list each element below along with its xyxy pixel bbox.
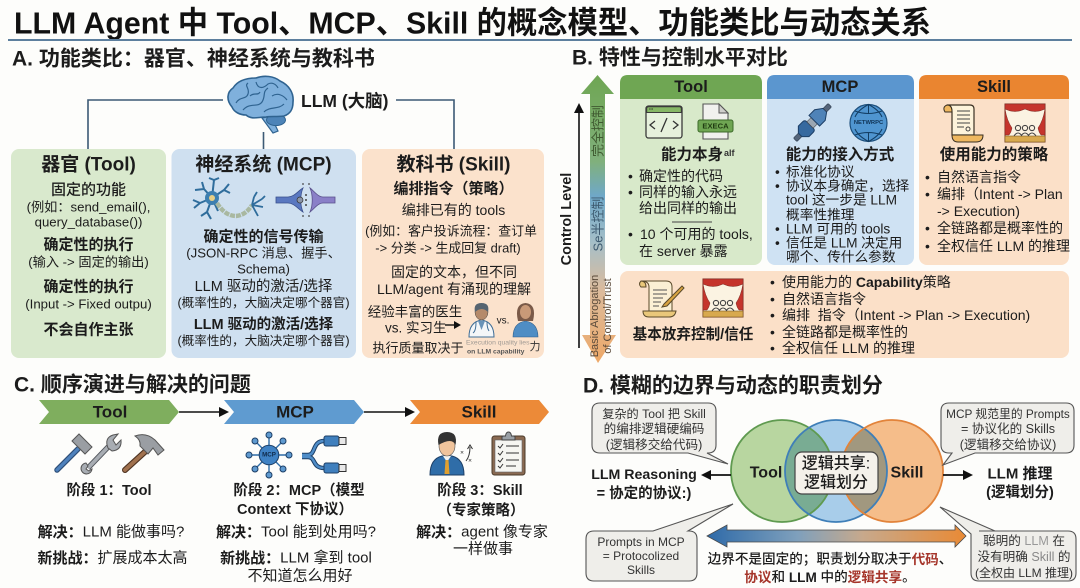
icon: theatre curtain — [703, 279, 743, 317]
stage 3 text: 一样做事 — [453, 540, 513, 558]
callout: smart LLM: 没有明确 Skill 的 — [977, 549, 1071, 564]
card: organ (Tool) — [11, 149, 166, 358]
card: organ (Tool): 确定性的执行 — [43, 278, 134, 296]
card: Tool: 在 server 暴露 — [639, 243, 728, 259]
ribbon: MCP — [224, 400, 364, 424]
card: textbook (Skill): 固定的文本，但不同 — [391, 264, 517, 280]
icon: exec file: EXECA — [702, 122, 729, 130]
card: abrogation of control — [620, 271, 1069, 358]
control level axis — [559, 103, 584, 348]
card: MCP — [767, 75, 914, 265]
panel D: blurry boundaries — [583, 374, 1076, 584]
left label: LLM reasoning — [591, 467, 697, 502]
card: Tool: • — [628, 184, 633, 200]
card: Skill — [919, 75, 1070, 265]
card: abrogation of control: 编排 指令（Intent -> Plan -> Execution) — [782, 307, 1030, 323]
icon: plug — [790, 100, 835, 145]
icon: globe: NETWRPC — [854, 120, 884, 126]
callout: prompts in MCP — [586, 504, 733, 581]
conclusion text: 协议和 LLM 中的逻辑共享。 — [744, 568, 916, 584]
callout: prompts in MCP: Prompts in MCP — [597, 535, 685, 549]
card: MCP: 信任是 LLM 决定用 — [786, 236, 902, 250]
icon: MCP hub — [246, 432, 292, 478]
conclusion text: 边界不是固定的；职责划分取决于代码、 — [708, 550, 952, 568]
card: Skill: 自然语言指令 — [937, 169, 1021, 185]
icon: scroll — [944, 105, 983, 142]
callout: smart LLM: (全权由 LLM 推理) — [975, 565, 1073, 580]
card: MCP: • — [775, 178, 780, 194]
card: textbook (Skill): 教科书 (Skill) — [396, 154, 511, 176]
stage 1 text: 解决：LLM 能做事吗? — [38, 522, 184, 540]
stage 2 text: 阶段 2：MCP（模型 — [233, 481, 365, 499]
card: Skill: 编排（Intent -> Plan — [937, 186, 1063, 202]
card: textbook (Skill): (例如：客户投诉流程：查订单 — [365, 224, 537, 238]
card: organ (Tool): (Input -> Fixed outpu) — [25, 296, 152, 312]
card: MCP: 标准化协议 — [786, 164, 855, 180]
icon: split cable — [302, 436, 346, 473]
card: Skill: • — [925, 186, 930, 202]
icon: neuron — [193, 178, 265, 219]
venn diagram: Skill — [891, 464, 923, 482]
arrow: left — [701, 470, 731, 480]
card: MCP: • — [775, 236, 780, 250]
card: textbook (Skill): vs. — [497, 316, 509, 326]
card: organ (Tool): (例如：send_email(), — [27, 200, 150, 214]
panel B: characteristics and control level — [559, 46, 1070, 363]
icon: brain — [228, 76, 293, 133]
card: Tool — [620, 75, 762, 265]
panel A: functional analogy — [11, 46, 544, 358]
faded overlapping caption — [466, 340, 530, 356]
card: organ (Tool): 固定的功能 — [51, 180, 126, 198]
icon: theatre curtain — [1005, 104, 1045, 142]
card: Tool: 10 个可用的 tools, — [640, 226, 753, 242]
icon: code window: ••• — [649, 106, 654, 111]
card: Tool: 给出同样的输出 — [639, 200, 737, 216]
card: organ (Tool): 确定性的执行 — [43, 236, 134, 254]
icon: hammer and wrench tools — [57, 434, 164, 474]
card: Skill: 使用能力的策略 — [940, 144, 1049, 164]
icon: MCP hub: MCP — [262, 452, 276, 458]
card: nervous system (MCP): 神经系统 (MCP) — [195, 152, 332, 176]
stage 2 text: Context 下协议） — [237, 501, 353, 518]
card: Tool: • — [628, 226, 633, 242]
card: MCP: • — [775, 164, 780, 180]
card: Tool: • — [628, 168, 633, 184]
card: MCP: 能力的接入方式 — [786, 144, 895, 164]
callout: MCP prompts: = 协议化的 Skills — [961, 421, 1055, 436]
card: abrogation of control: 自然语言指令 — [782, 291, 866, 307]
heading A: A. 功能类比：器官、神经系统与教科书 — [12, 46, 375, 70]
card: organ (Tool): 器官 (Tool) — [41, 152, 136, 176]
card: Tool: Tool — [674, 78, 708, 96]
ribbon: MCP: MCP — [276, 402, 314, 422]
venn diagram — [731, 420, 943, 522]
callout: smart LLM: 聪明的 LLM 在 — [983, 533, 1065, 548]
heading D: D. 模糊的边界与动态的职责划分 — [583, 374, 883, 398]
arrow: to doctor — [445, 321, 461, 329]
card: textbook (Skill): 经验丰富的医生 — [368, 304, 462, 320]
card: nervous system (MCP): LLM 驱动的激活/选择 — [194, 315, 334, 333]
title: LLM Agent 中 Tool、MCP、Skill 的概念模型、功能类比与动态关系 — [14, 6, 931, 40]
heading B: B. 特性与控制水平对比 — [572, 46, 788, 70]
right label: LLM inference: (逻辑划分) — [986, 484, 1054, 501]
card: nervous system (MCP): LLM 驱动的激活/选择 — [195, 278, 333, 295]
left label: LLM reasoning: LLM Reasoning — [591, 467, 697, 483]
card: nervous system (MCP): (概率性的，大脑决定哪个器官) — [177, 295, 350, 310]
card: organ (Tool): query_database()) — [35, 214, 142, 230]
card: textbook (Skill): 执行质量取决于 — [372, 340, 464, 356]
control gradient arrow: Basic Abrogation — [589, 275, 601, 357]
card: MCP: 概率性推理 — [786, 206, 855, 222]
card: nervous system (MCP): 确定性的信号传输 — [203, 228, 324, 246]
card: nervous system (MCP) — [172, 149, 356, 358]
card: abrogation of control: • — [770, 307, 775, 323]
control gradient arrow — [581, 75, 616, 363]
callout: MCP prompts: (逻辑移交给协议) — [960, 437, 1056, 452]
card: textbook (Skill) — [362, 149, 544, 358]
card: Tool: 能力本身 — [661, 144, 723, 164]
callout: smart LLM — [940, 507, 1076, 581]
stage 1 text — [37, 481, 188, 566]
conclusion text — [708, 550, 952, 584]
card: abrogation of control: • — [770, 291, 775, 307]
card: nervous system (MCP): Schema) — [237, 262, 290, 276]
icon: expert strategist: × — [468, 458, 472, 464]
card: Tool: 同样的输入永远 — [639, 184, 737, 200]
stage 2 text — [216, 481, 376, 584]
arrow: MCP to Skill — [364, 407, 415, 417]
card: organ (Tool): (输入 -> 固定的输出) — [28, 254, 149, 270]
card: Skill: Skill — [977, 78, 1011, 96]
right label: LLM inference — [986, 466, 1054, 501]
callout: MCP prompts — [941, 403, 1074, 465]
venn diagram: Tool — [750, 464, 782, 482]
card: textbook (Skill): -> 分类 -> 生成回复 draft) — [375, 240, 521, 256]
icon: intern — [513, 303, 538, 337]
heading C: C. 顺序演进与解决的问题 — [14, 374, 251, 396]
card: MCP: MCP — [822, 78, 858, 96]
icon: synapse — [276, 183, 335, 217]
left label: LLM reasoning: = 协定的协议:) — [597, 484, 691, 502]
card: MCP: • — [775, 222, 780, 236]
card: abrogation of control: 使用能力的 Capability策略 — [782, 274, 951, 290]
card: nervous system (MCP): (JSON-RPC 消息、握手、 — [186, 244, 341, 260]
card: Skill: 全权信任 LLM 的推理 — [937, 238, 1070, 254]
icon: expert strategist — [430, 432, 472, 475]
card: MCP: 哪个、传什么参数 — [786, 248, 896, 264]
card: MCP: 协议本身确定，选择 — [786, 178, 910, 194]
callout: tool hardcodes skill: (逻辑移交给代码) — [606, 437, 702, 452]
card: abrogation of control: • — [770, 324, 775, 340]
card: textbook (Skill): LLM/agent 有涌现的理解 — [377, 281, 531, 297]
stage 3 text — [416, 481, 548, 558]
card: abrogation of control: • — [770, 274, 775, 290]
icon: checklist clipboard — [492, 432, 525, 475]
panel C: sequential evolution — [14, 374, 549, 584]
card: textbook (Skill): 力 — [530, 340, 540, 353]
card: abrogation of control: 基本放弃控制/信任 — [633, 325, 754, 343]
card: Skill: • — [925, 238, 930, 254]
stage 2 text: 不知道怎么用好 — [247, 568, 353, 584]
callout: prompts in MCP: Skills — [627, 563, 655, 577]
right label: LLM inference: LLM 推理 — [988, 466, 1052, 482]
stage 1 text: 阶段 1：Tool — [66, 481, 152, 499]
card: Skill: • — [925, 220, 930, 236]
callout: MCP prompts: MCP 规范里的 Prompts — [946, 407, 1070, 421]
ribbon: Skill — [410, 400, 549, 424]
control gradient arrow: 完全控制 — [590, 105, 606, 157]
icon: scroll with pencil — [640, 281, 684, 317]
control level axis: Control Level — [559, 173, 575, 265]
card: abrogation of control: 全权信任 LLM 的推理 — [782, 340, 915, 356]
faded overlapping caption: Execution quality lies — [466, 340, 530, 346]
shared logic box: 逻辑共享: — [802, 454, 870, 472]
stage 3 text: 解决：agent 像专家 — [416, 522, 548, 540]
card: textbook (Skill): 编排指令（策略） — [393, 180, 514, 198]
card: organ (Tool): 不会自作主张 — [43, 320, 134, 338]
stage 3 text: （专家策略） — [438, 501, 524, 519]
card: abrogation of control: • — [770, 340, 775, 356]
card: Skill: • — [925, 169, 930, 185]
control gradient arrow: of Control/Trust — [602, 278, 614, 354]
card: Tool: alf — [724, 148, 736, 158]
card: nervous system (MCP): (概率性的，大脑决定哪个器官) — [177, 333, 350, 348]
card: abrogation of control: 全链路都是概率性的 — [782, 324, 908, 340]
ribbon: Skill: Skill — [462, 402, 496, 422]
stage 1 text: 新挑战：扩展成本太高 — [37, 548, 188, 566]
card: Skill: -> Execution) — [937, 203, 1020, 219]
callout: tool hardcodes skill: 复杂的 Tool 把 Skill — [602, 406, 706, 421]
card: textbook (Skill): vs. 实习生 — [385, 320, 447, 336]
card: Skill: 全链路都是概率性的 — [937, 220, 1063, 236]
double-headed gradient arrow — [707, 525, 966, 547]
arrow: Tool to MCP — [179, 407, 229, 417]
card: MCP: LLM 可用的 tools — [786, 222, 890, 236]
card: MCP: tool 这一步是 LLM — [786, 192, 897, 208]
ribbon: Tool — [39, 400, 179, 424]
card: Tool: 确定性的代码 — [639, 168, 723, 184]
brain label: LLM (大脑) — [301, 91, 388, 111]
stage 3 text: 阶段 3：Skill — [437, 481, 523, 499]
icon: globe — [850, 104, 887, 142]
control gradient arrow: Se半控制 — [590, 197, 606, 251]
shared logic box — [795, 452, 878, 494]
card: textbook (Skill): 编排已有的 tools — [402, 202, 505, 218]
icon: expert strategist: × — [460, 450, 464, 456]
icon: code window — [646, 106, 682, 138]
icon: doctor — [469, 303, 494, 337]
stage 2 text: 新挑战：LLM 拿到 tool — [220, 548, 372, 566]
callout: tool hardcodes skill: 的编排逻辑硬编码 — [604, 421, 704, 436]
shared logic box: 逻辑划分 — [804, 474, 868, 492]
stage 2 text: 解决：Tool 能到处用吗? — [216, 522, 376, 540]
faded overlapping caption: on LLM capability — [467, 348, 525, 356]
callout: prompts in MCP: = Protocolized — [603, 549, 679, 563]
arrow: right — [943, 470, 973, 480]
ribbon: Tool: Tool — [93, 402, 127, 422]
icon: exec file — [698, 104, 733, 139]
callout: tool hardcodes skill — [592, 403, 728, 464]
